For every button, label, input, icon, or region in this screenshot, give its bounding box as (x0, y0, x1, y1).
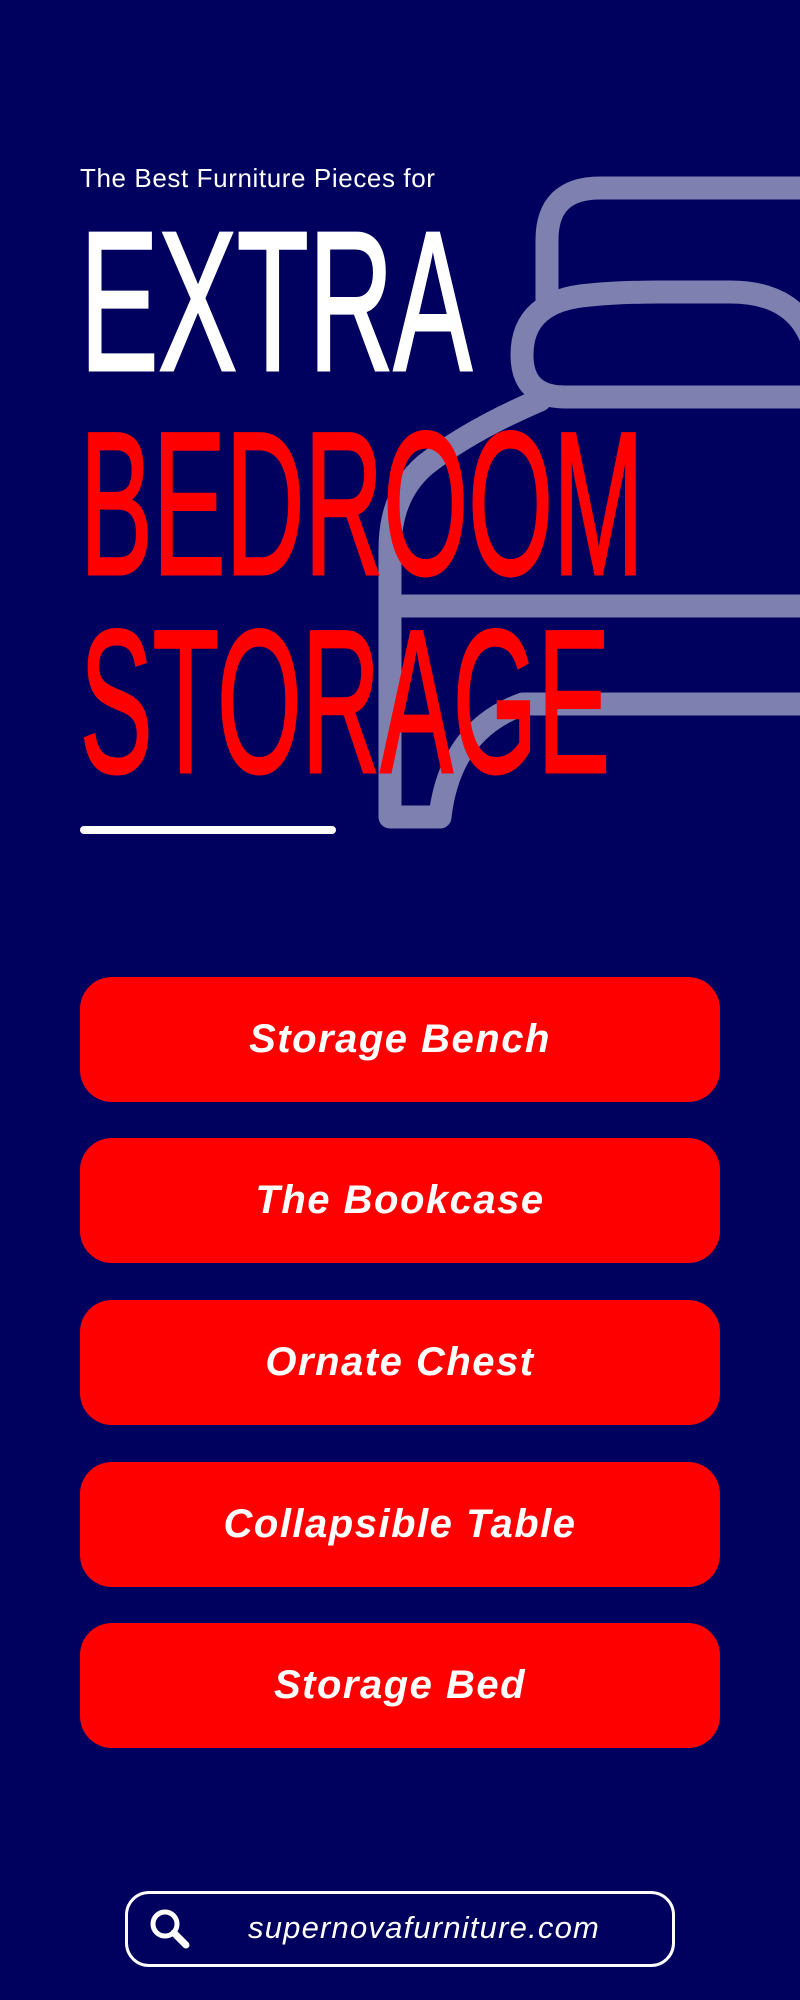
button: storage bench (80, 977, 720, 1102)
button: storage bed (80, 1623, 720, 1748)
button: collapsible table (80, 1462, 720, 1587)
button: ornate chest: Ornate Chest (265, 1340, 535, 1384)
underline (80, 826, 336, 834)
button: collapsible table: Collapsible Table (224, 1502, 576, 1546)
button: storage bed: Storage Bed (274, 1663, 526, 1707)
button: the bookcase: The Bookcase (255, 1178, 545, 1222)
title (80, 191, 644, 816)
icon: magnifier (150, 1910, 190, 1948)
footer url pill (125, 1891, 675, 1967)
button: the bookcase (80, 1138, 720, 1263)
title: EXTRA (80, 191, 472, 413)
icon: bed outline (378, 176, 800, 828)
button: ornate chest (80, 1300, 720, 1425)
url text: supernovafurniture.com (248, 1910, 600, 1945)
subtitle: The Best Furniture Pieces for (80, 163, 436, 193)
button: storage bench: Storage Bench (249, 1017, 551, 1061)
